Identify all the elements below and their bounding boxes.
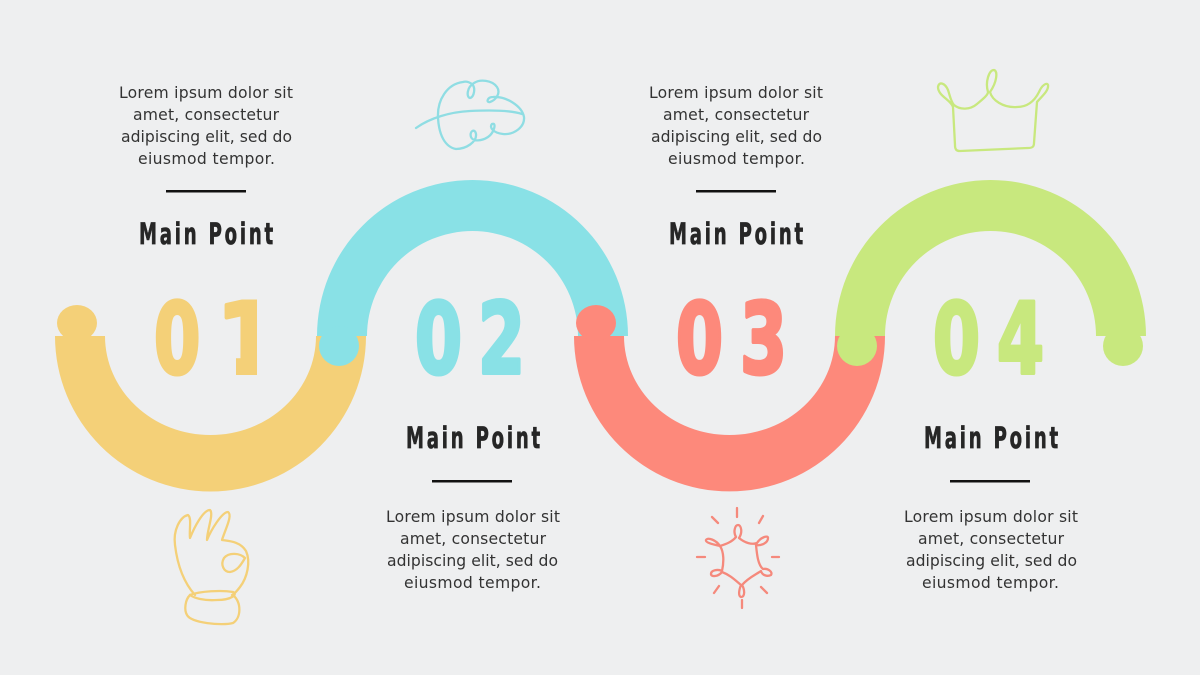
step 1 description: amet, consectetur — [133, 106, 280, 124]
step 4 description: Lorem ipsum dolor sit — [904, 508, 1078, 526]
step 4 heading: Main Point — [924, 421, 1061, 455]
step 2 description — [386, 508, 560, 592]
wave: connected arc segments — [55, 180, 1146, 492]
step 1 description: Lorem ipsum dolor sit — [119, 84, 293, 102]
step 4 description: eiusmod tempor. — [922, 574, 1059, 592]
step 3 description: eiusmod tempor. — [668, 150, 805, 168]
number 04: 0 — [933, 282, 980, 396]
step 2 description: adipiscing elit, sed do — [387, 552, 558, 570]
step 2 heading: Main Point — [406, 421, 543, 455]
step 1 text block — [119, 84, 293, 251]
step 2 description: amet, consectetur — [400, 530, 547, 548]
step 3 description: Lorem ipsum dolor sit — [649, 84, 823, 102]
step 3 description — [649, 84, 823, 168]
step 3 divider — [696, 190, 776, 192]
step 3 text block — [649, 84, 823, 251]
step 1 description: eiusmod tempor. — [138, 150, 275, 168]
step 1 divider — [166, 190, 246, 192]
number 03: 0 — [676, 282, 723, 396]
number 01: 1 — [216, 282, 281, 397]
step 2 description: eiusmod tempor. — [404, 574, 541, 592]
number 04: 4 — [997, 282, 1044, 396]
step 1 description: adipiscing elit, sed do — [121, 128, 292, 146]
number 03 — [676, 282, 787, 396]
step 1 description — [119, 84, 293, 168]
step 2 text block — [386, 421, 560, 592]
number 01 — [156, 298, 257, 376]
step 2 description: Lorem ipsum dolor sit — [386, 508, 560, 526]
icon: hand — [175, 510, 248, 624]
number 02 — [415, 282, 525, 396]
step 3 description: adipiscing elit, sed do — [651, 128, 822, 146]
number 02: 0 — [415, 282, 462, 396]
number 01: 0 — [154, 282, 200, 396]
arc segment 3: red — [574, 305, 885, 491]
number 04 — [933, 282, 1044, 396]
icon: starburst — [697, 508, 779, 608]
step 2 divider — [432, 480, 512, 482]
step 3 description: amet, consectetur — [663, 106, 810, 124]
step 4 divider — [950, 480, 1030, 482]
step 1 heading: Main Point — [139, 217, 276, 251]
icon: leaf — [416, 81, 524, 149]
step 4 text block — [904, 421, 1078, 592]
number 03: 3 — [740, 282, 787, 396]
arc segment 4: green — [835, 180, 1146, 366]
icon: crown — [938, 70, 1048, 151]
step 4 description: adipiscing elit, sed do — [906, 552, 1077, 570]
step 4 description: amet, consectetur — [918, 530, 1065, 548]
step 3 heading: Main Point — [669, 217, 806, 251]
number 02: 2 — [478, 282, 525, 396]
arc segment 1: yellow — [55, 305, 366, 492]
arc segment 2: blue — [317, 180, 628, 366]
step 4 description — [904, 508, 1078, 592]
